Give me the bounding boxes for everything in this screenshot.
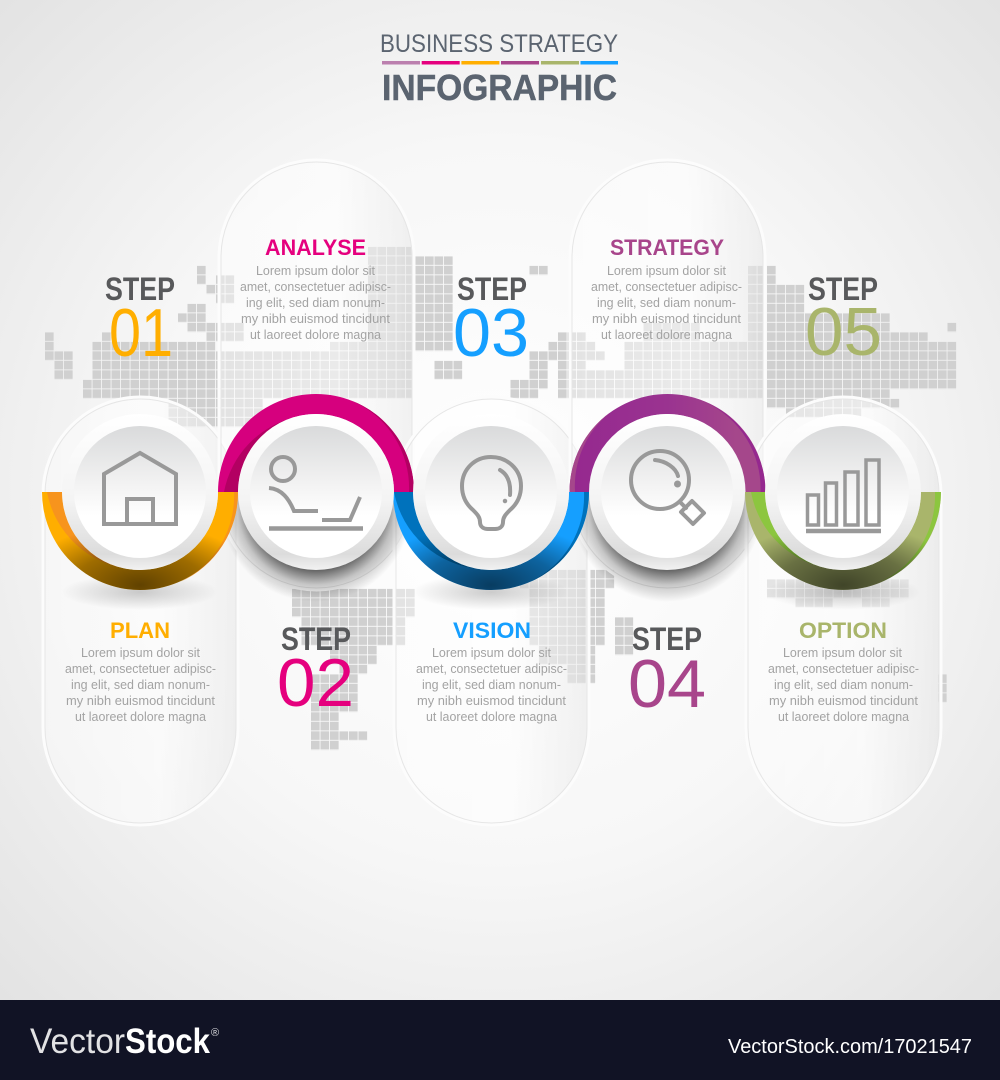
text block: option: ing elit, sed diam nonum-: [774, 677, 913, 692]
text block: plan: ing elit, sed diam nonum-: [71, 677, 210, 692]
step 04 label: STEP: [632, 621, 702, 657]
ring 2 magenta: [218, 394, 414, 492]
text block: vision: ut laoreet dolore magna: [426, 709, 558, 724]
text block: strategy: [591, 235, 742, 342]
step 02 label: 02: [277, 645, 354, 721]
capsule panel 2: analyse: [219, 160, 414, 590]
text block: option: my nibh euismod tincidunt: [769, 693, 918, 708]
text block: option: amet, consectetuer adipisc-: [768, 661, 919, 676]
shadow under disc 4: [579, 494, 756, 600]
icon: bar chart: [806, 460, 881, 531]
ring 1 orange: [42, 492, 238, 590]
footer logo: Stock: [125, 1022, 210, 1061]
text block: strategy: ing elit, sed diam nonum-: [597, 295, 736, 310]
pixel world map: [45, 247, 957, 750]
disc 3 with bulb icon: [413, 414, 569, 570]
step 03 label: STEP: [457, 271, 527, 307]
footer bar: [0, 1000, 1000, 1080]
text block: vision: Lorem ipsum dolor sit: [432, 645, 551, 660]
step 01 label: 01: [109, 295, 173, 371]
ring 5 green: [745, 492, 941, 590]
text block: option: [768, 618, 919, 724]
text block: option: OPTION: [799, 618, 887, 643]
text block: strategy: ut laoreet dolore magna: [601, 327, 733, 342]
title: INFOGRAPHIC: [382, 67, 617, 108]
icon: house: [104, 453, 176, 524]
title: BUSINESS STRATEGY: [380, 30, 618, 58]
text block: vision: VISION: [453, 618, 531, 643]
text block: vision: [416, 618, 567, 724]
capsule panel 5: option: [746, 397, 941, 825]
icon: reclining person: [269, 457, 363, 528]
step 02 label: STEP: [281, 621, 351, 657]
disc 2 with person icon: [238, 414, 394, 570]
ring 3 blue: [393, 492, 589, 590]
step 03 label: 03: [453, 295, 529, 371]
text block: plan: PLAN: [110, 618, 170, 643]
text block: analyse: my nibh euismod tincidunt: [241, 311, 390, 326]
text block: vision: amet, consectetuer adipisc-: [416, 661, 567, 676]
text block: strategy: Lorem ipsum dolor sit: [607, 263, 726, 278]
text block: strategy: STRATEGY: [610, 235, 724, 260]
text block: vision: my nibh euismod tincidunt: [417, 693, 566, 708]
text block: plan: [65, 618, 216, 724]
text block: analyse: ing elit, sed diam nonum-: [246, 295, 385, 310]
text block: strategy: my nibh euismod tincidunt: [592, 311, 741, 326]
title: [380, 30, 618, 108]
text block: analyse: Lorem ipsum dolor sit: [256, 263, 375, 278]
text block: option: ut laoreet dolore magna: [778, 709, 910, 724]
text block: plan: amet, consectetuer adipisc-: [65, 661, 216, 676]
step 01 label: [105, 271, 175, 371]
text block: option: Lorem ipsum dolor sit: [783, 645, 902, 660]
footer logo: ®: [211, 1027, 219, 1039]
disc 5 with bar chart icon: [765, 414, 921, 570]
text block: plan: ut laoreet dolore magna: [75, 709, 207, 724]
text block: strategy: amet, consectetuer adipisc-: [591, 279, 742, 294]
text block: analyse: amet, consectetuer adipisc-: [240, 279, 391, 294]
text block: vision: ing elit, sed diam nonum-: [422, 677, 561, 692]
ring 4 purple: [569, 394, 766, 492]
capsule panel 3: vision: [394, 397, 589, 825]
text block: analyse: ANALYSE: [265, 235, 366, 260]
shadow under ring 3: [413, 574, 569, 610]
icon: light bulb: [462, 457, 521, 529]
shadow under ring 5: [765, 574, 921, 610]
shadow under ring 1: [62, 574, 218, 610]
text block: plan: my nibh euismod tincidunt: [66, 693, 215, 708]
capsule panel 4: strategy: [570, 160, 765, 590]
step 05 label: 05: [805, 294, 882, 370]
step 04 label: 04: [628, 646, 706, 722]
text block: plan: Lorem ipsum dolor sit: [81, 645, 200, 660]
text block: analyse: [240, 235, 391, 342]
footer logo: Vector: [30, 1022, 125, 1061]
step 01 label: STEP: [105, 271, 175, 307]
capsule panel 1: plan: [43, 397, 238, 825]
disc 4 with magnifier icon: [589, 414, 745, 570]
shadow under disc 2: [228, 494, 404, 599]
icon: magnifying glass: [631, 451, 704, 524]
footer image id: VectorStock.com/17021547: [728, 1036, 972, 1058]
text block: analyse: ut laoreet dolore magna: [250, 327, 382, 342]
step 05 label: STEP: [808, 271, 878, 307]
disc 1 with house icon: [62, 414, 218, 570]
footer logo: [30, 1022, 219, 1061]
